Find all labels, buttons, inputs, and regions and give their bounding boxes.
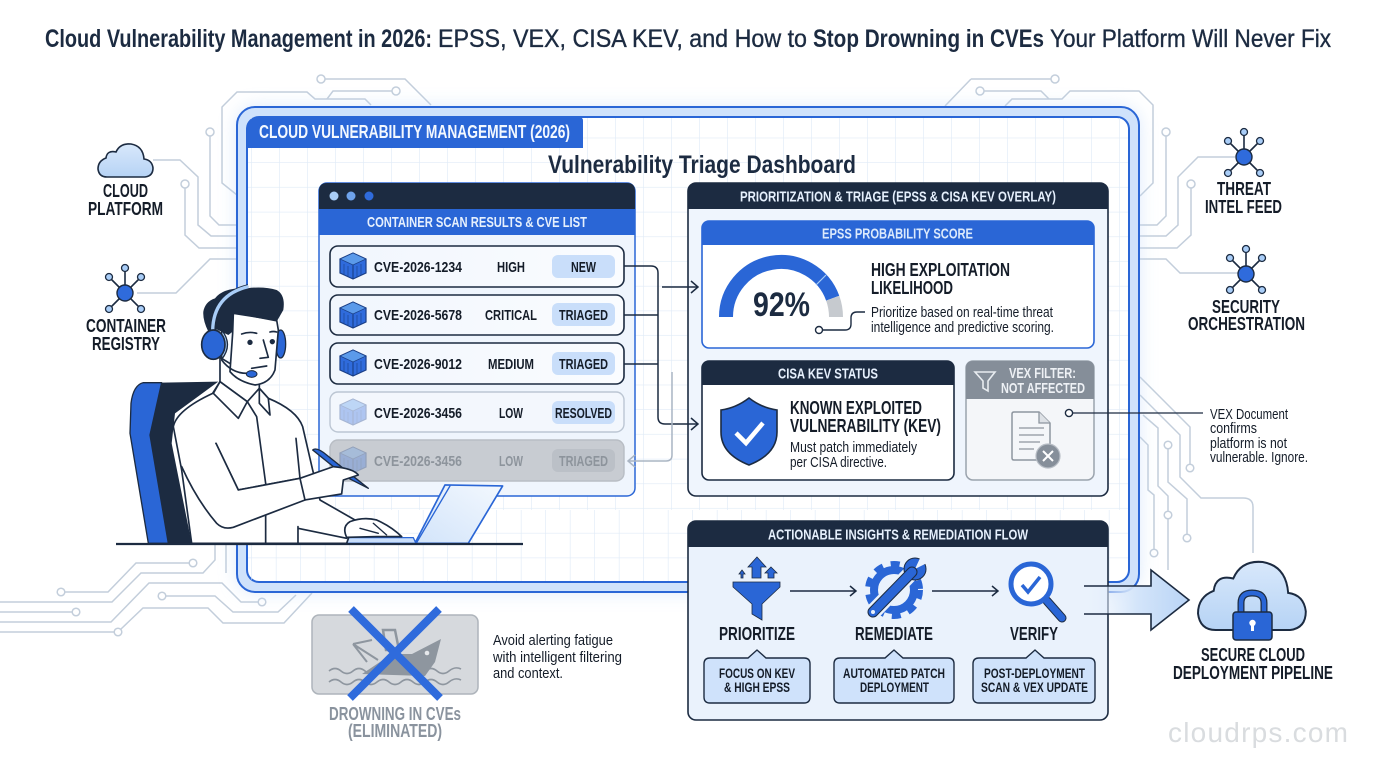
icon: shield check: [721, 398, 777, 465]
icon: magnifier check: [1011, 564, 1062, 618]
row: CVE-2026-5678: CVE-2026-5678: [374, 307, 462, 324]
EPSS text: [871, 260, 1054, 336]
arrows: CVE list to triage panels: [624, 266, 698, 467]
EPSS text: LIKELIHOOD: [871, 278, 953, 298]
headset: [202, 287, 257, 377]
step labels: [719, 624, 1058, 644]
step labels: REMEDIATE: [855, 624, 933, 644]
VEX callout: VEX Document: [1210, 407, 1288, 423]
VEX callout: [1065, 407, 1308, 466]
typing hand: [345, 519, 402, 537]
panel: prioritization and triage: PRIORITIZATION & TRIAGE (EPSS & CISA KEV OVERLAY): [740, 188, 1056, 206]
card: EPSS probability score: [702, 221, 1094, 348]
callout: post-deployment scan: [973, 650, 1095, 703]
icon: gear and wrench: [868, 556, 929, 616]
card: CISA KEV status: CISA KEV STATUS: [778, 366, 878, 382]
label: secure cloud deployment pipeline: [1173, 645, 1333, 683]
watermark: cloudrps.com: [1168, 717, 1348, 748]
icon: security orchestration hub: [1226, 246, 1266, 294]
dashboard tab: [247, 117, 583, 148]
step labels: PRIORITIZE: [719, 624, 795, 644]
label: container registry: [86, 316, 166, 354]
shirt and torso: [173, 382, 355, 543]
card: VEX filter: [966, 361, 1094, 480]
row: CVE-2026-3456 resolved: CVE-2026-3456: [374, 405, 462, 422]
panel: container scan results: [319, 183, 635, 496]
fatigue note: with intelligent filtering: [492, 649, 622, 666]
grey ship card: [312, 615, 478, 694]
row: CVE-2026-3456 resolved: LOW: [499, 405, 524, 422]
VEX callout: vulnerable. Ignore.: [1210, 450, 1308, 466]
icon: funnel with arrows: [733, 557, 780, 620]
icon: container registry hub: [106, 264, 144, 312]
KEV text: Must patch immediately: [790, 440, 918, 456]
row: CVE-2026-3456 triaged faded: TRIAGED: [559, 453, 608, 470]
hair: [203, 287, 284, 335]
row: CVE-2026-1234: NEW: [571, 259, 597, 276]
callout: automated patch: [834, 650, 954, 703]
office chair: [130, 382, 218, 543]
label: security orchestration: ORCHESTRATION: [1188, 314, 1305, 334]
arm: [182, 443, 305, 528]
KEV text: VULNERABILITY (KEV): [790, 416, 941, 436]
analyst at desk: [130, 287, 503, 543]
row: CVE-2026-1234: [330, 246, 624, 287]
circuit traces: [0, 75, 1253, 636]
fatigue note: and context.: [493, 665, 563, 682]
gauge: 92%: [753, 286, 810, 324]
card: EPSS probability score: EPSS PROBABILITY SCORE: [822, 226, 973, 242]
title: Stop Drowning in CVEs: [813, 25, 1044, 53]
title: [45, 25, 1331, 53]
EPSS text: intelligence and predictive scoring.: [871, 320, 1054, 336]
card: VEX filter: NOT AFFECTED: [1001, 380, 1085, 397]
face: [230, 313, 278, 385]
icon: threat intel hub: [1224, 128, 1264, 176]
panel: actionable insights and remediation flow: ACTIONABLE INSIGHTS & REMEDIATION FLOW: [768, 526, 1029, 544]
title: EPSS, VEX, CISA KEV, and How to: [438, 25, 807, 53]
row: CVE-2026-9012: MEDIUM: [488, 356, 534, 373]
KEV text: per CISA directive.: [790, 455, 887, 471]
dashboard frame: [237, 107, 1139, 592]
callout: focus on KEV: & HIGH EPSS: [724, 679, 790, 695]
panel: prioritization and triage: [688, 183, 1108, 496]
icon: secure cloud lock: [1198, 562, 1306, 640]
label: container registry: REGISTRY: [92, 334, 160, 354]
callout: focus on KEV: [704, 650, 810, 703]
row: CVE-2026-9012: [330, 343, 624, 384]
icon: document not affected: [1012, 412, 1060, 468]
row: CVE-2026-3456 triaged faded: LOW: [499, 453, 524, 470]
big arrow to secure pipeline: [1084, 570, 1189, 630]
eliminated label: (ELIMINATED): [348, 721, 442, 741]
dashboard heading: Vulnerability Triage Dashboard: [548, 151, 856, 179]
panel: container scan results: CONTAINER SCAN RESULTS & CVE LIST: [367, 214, 587, 231]
panel: actionable insights and remediation flow: [688, 521, 1108, 720]
card: CISA KEV status: [702, 361, 954, 480]
writing hand: [300, 467, 358, 500]
title: Cloud Vulnerability Management in 2026:: [45, 25, 432, 53]
pen: [313, 449, 368, 488]
row: CVE-2026-5678: [330, 295, 624, 335]
card: VEX filter: VEX FILTER:: [1009, 365, 1076, 382]
desk line: [116, 543, 523, 545]
fatigue note: [492, 632, 622, 682]
row: CVE-2026-1234: CVE-2026-1234: [374, 259, 463, 276]
label: threat intel feed: [1205, 179, 1282, 217]
gauge: [726, 262, 836, 324]
arrow: remediate to verify: [932, 586, 998, 596]
right ear cup: [276, 330, 286, 358]
label: cloud platform: PLATFORM: [88, 199, 163, 219]
label: cloud platform: CLOUD: [103, 181, 148, 201]
icon: funnel: [975, 372, 995, 391]
eliminated label: DROWNING IN CVEs: [329, 704, 461, 724]
VEX callout: confirms: [1210, 421, 1257, 437]
row: CVE-2026-5678: CRITICAL: [485, 307, 537, 324]
EPSS text: HIGH EXPLOITATION: [871, 260, 1010, 280]
label: cloud platform: [88, 181, 163, 219]
fatigue note: Avoid alerting fatigue: [493, 632, 613, 649]
eliminated label: [329, 704, 461, 741]
row: CVE-2026-3456 triaged faded: [330, 440, 624, 481]
step labels: VERIFY: [1010, 624, 1058, 644]
label: threat intel feed: THREAT: [1217, 179, 1271, 199]
row: CVE-2026-1234: HIGH: [497, 259, 525, 276]
label: threat intel feed: INTEL FEED: [1205, 197, 1282, 217]
label: secure cloud deployment pipeline: SECURE CLOUD: [1201, 645, 1305, 665]
callout: automated patch: DEPLOYMENT: [860, 679, 929, 695]
callout: post-deployment scan: SCAN & VEX UPDATE: [981, 679, 1088, 695]
title: Your Platform Will Never Fix: [1050, 25, 1331, 53]
arrow: prioritize to remediate: [790, 586, 856, 596]
KEV text: KNOWN EXPLOITED: [790, 398, 922, 418]
row: CVE-2026-3456 resolved: [330, 392, 624, 432]
row: CVE-2026-9012: CVE-2026-9012: [374, 356, 462, 373]
row: CVE-2026-9012: TRIAGED: [559, 356, 608, 373]
EPSS text: Prioritize based on real-time threat: [871, 305, 1053, 321]
row: CVE-2026-3456 triaged faded: CVE-2026-3456: [374, 453, 462, 470]
KEV text: [790, 398, 941, 471]
label: security orchestration: [1188, 297, 1305, 334]
drowning in CVEs eliminated: [312, 609, 622, 741]
label: container registry: CONTAINER: [86, 316, 166, 336]
laptop: [347, 485, 503, 543]
callout: post-deployment scan: POST-DEPLOYMENT: [984, 665, 1085, 681]
row: CVE-2026-3456 resolved: RESOLVED: [555, 405, 612, 422]
cross-out: [350, 609, 440, 698]
label: security orchestration: SECURITY: [1212, 297, 1280, 317]
callout: focus on KEV: FOCUS ON KEV: [719, 665, 795, 681]
VEX callout: platform is not: [1210, 436, 1287, 452]
icon: cloud platform: [98, 144, 153, 177]
collar and shirt lines: [213, 382, 347, 543]
neck: [220, 357, 259, 402]
dashboard tab: CLOUD VULNERABILITY MANAGEMENT (2026): [259, 122, 570, 142]
callout line: [816, 312, 865, 334]
row: CVE-2026-5678: TRIAGED: [559, 307, 608, 324]
callout: automated patch: AUTOMATED PATCH: [843, 665, 945, 681]
